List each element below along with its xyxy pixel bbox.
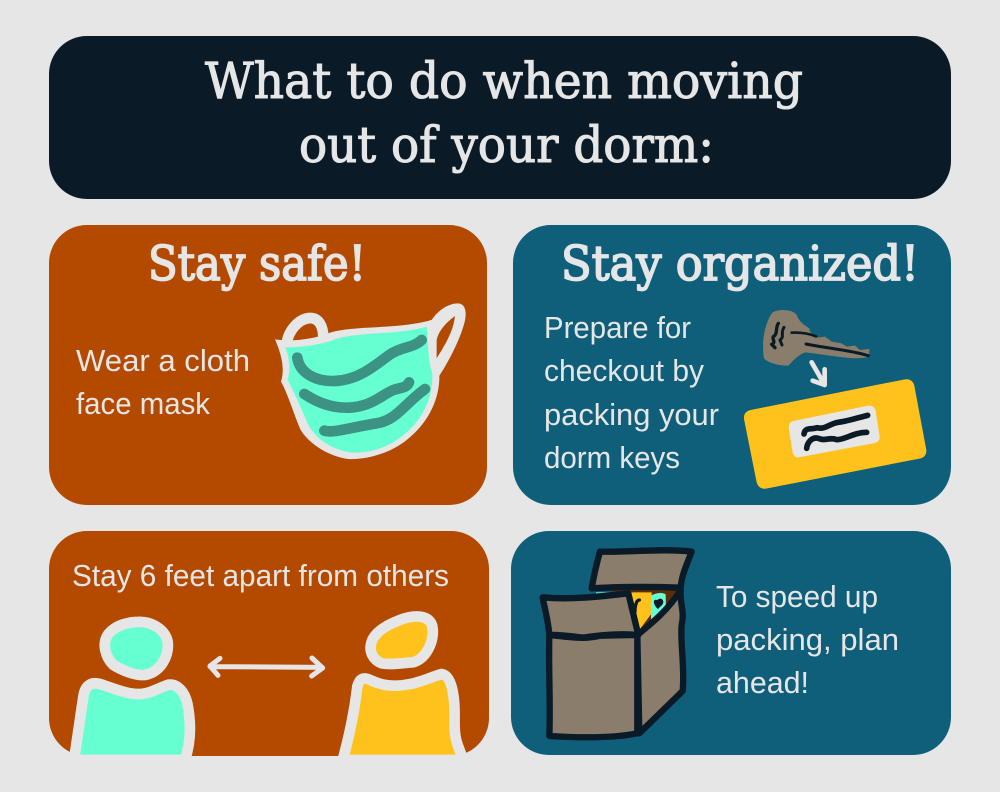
text: to speed up packing: To speed up bbox=[716, 579, 878, 614]
right side bbox=[637, 590, 683, 733]
heading: stay organized: Stay organized! bbox=[561, 236, 919, 292]
panel: plan ahead bbox=[511, 531, 951, 755]
icon: cardboard box bbox=[543, 550, 692, 737]
text: wear a cloth face mask: Wear a cloth bbox=[76, 343, 250, 378]
text: prepare for checkout: checkout by bbox=[544, 353, 704, 388]
panel: stay organized bbox=[513, 225, 951, 505]
icon: face mask bbox=[275, 303, 466, 459]
box interior bbox=[592, 588, 682, 632]
title banner: out of your dorm: bbox=[299, 116, 714, 174]
corner mask bbox=[0, 756, 1000, 792]
title banner bbox=[49, 36, 951, 199]
heading: stay safe: Stay safe! bbox=[148, 236, 366, 292]
icon: key and envelope bbox=[744, 310, 926, 489]
arrow: double-headed bbox=[210, 658, 323, 676]
text: prepare for checkout bbox=[544, 310, 719, 475]
text: to speed up packing: packing, plan bbox=[716, 622, 899, 657]
icon: envelope bbox=[744, 379, 926, 489]
text: prepare for checkout: packing your bbox=[544, 397, 719, 432]
arrow: key to envelope bbox=[812, 362, 825, 385]
text: to speed up packing bbox=[716, 579, 899, 700]
text: to speed up packing: ahead! bbox=[716, 665, 809, 700]
text: prepare for checkout: Prepare for bbox=[544, 310, 691, 345]
icon: two people with arrow bbox=[74, 616, 463, 760]
front bbox=[549, 635, 637, 737]
title banner: What to do when moving bbox=[205, 52, 803, 110]
panel: stay 6 feet apart bbox=[0, 531, 1000, 792]
panel: stay safe bbox=[49, 225, 487, 505]
icon: person left bbox=[74, 622, 190, 760]
back flap bbox=[592, 550, 692, 588]
text: stay 6 feet apart: Stay 6 feet apart from others bbox=[72, 558, 449, 593]
front flap bbox=[543, 593, 638, 638]
text: wear a cloth face mask: face mask bbox=[76, 386, 210, 421]
text: prepare for checkout: dorm keys bbox=[544, 440, 680, 475]
icon: key bbox=[763, 310, 869, 366]
text: wear a cloth face mask bbox=[76, 343, 250, 421]
icon: person right bbox=[343, 616, 463, 760]
